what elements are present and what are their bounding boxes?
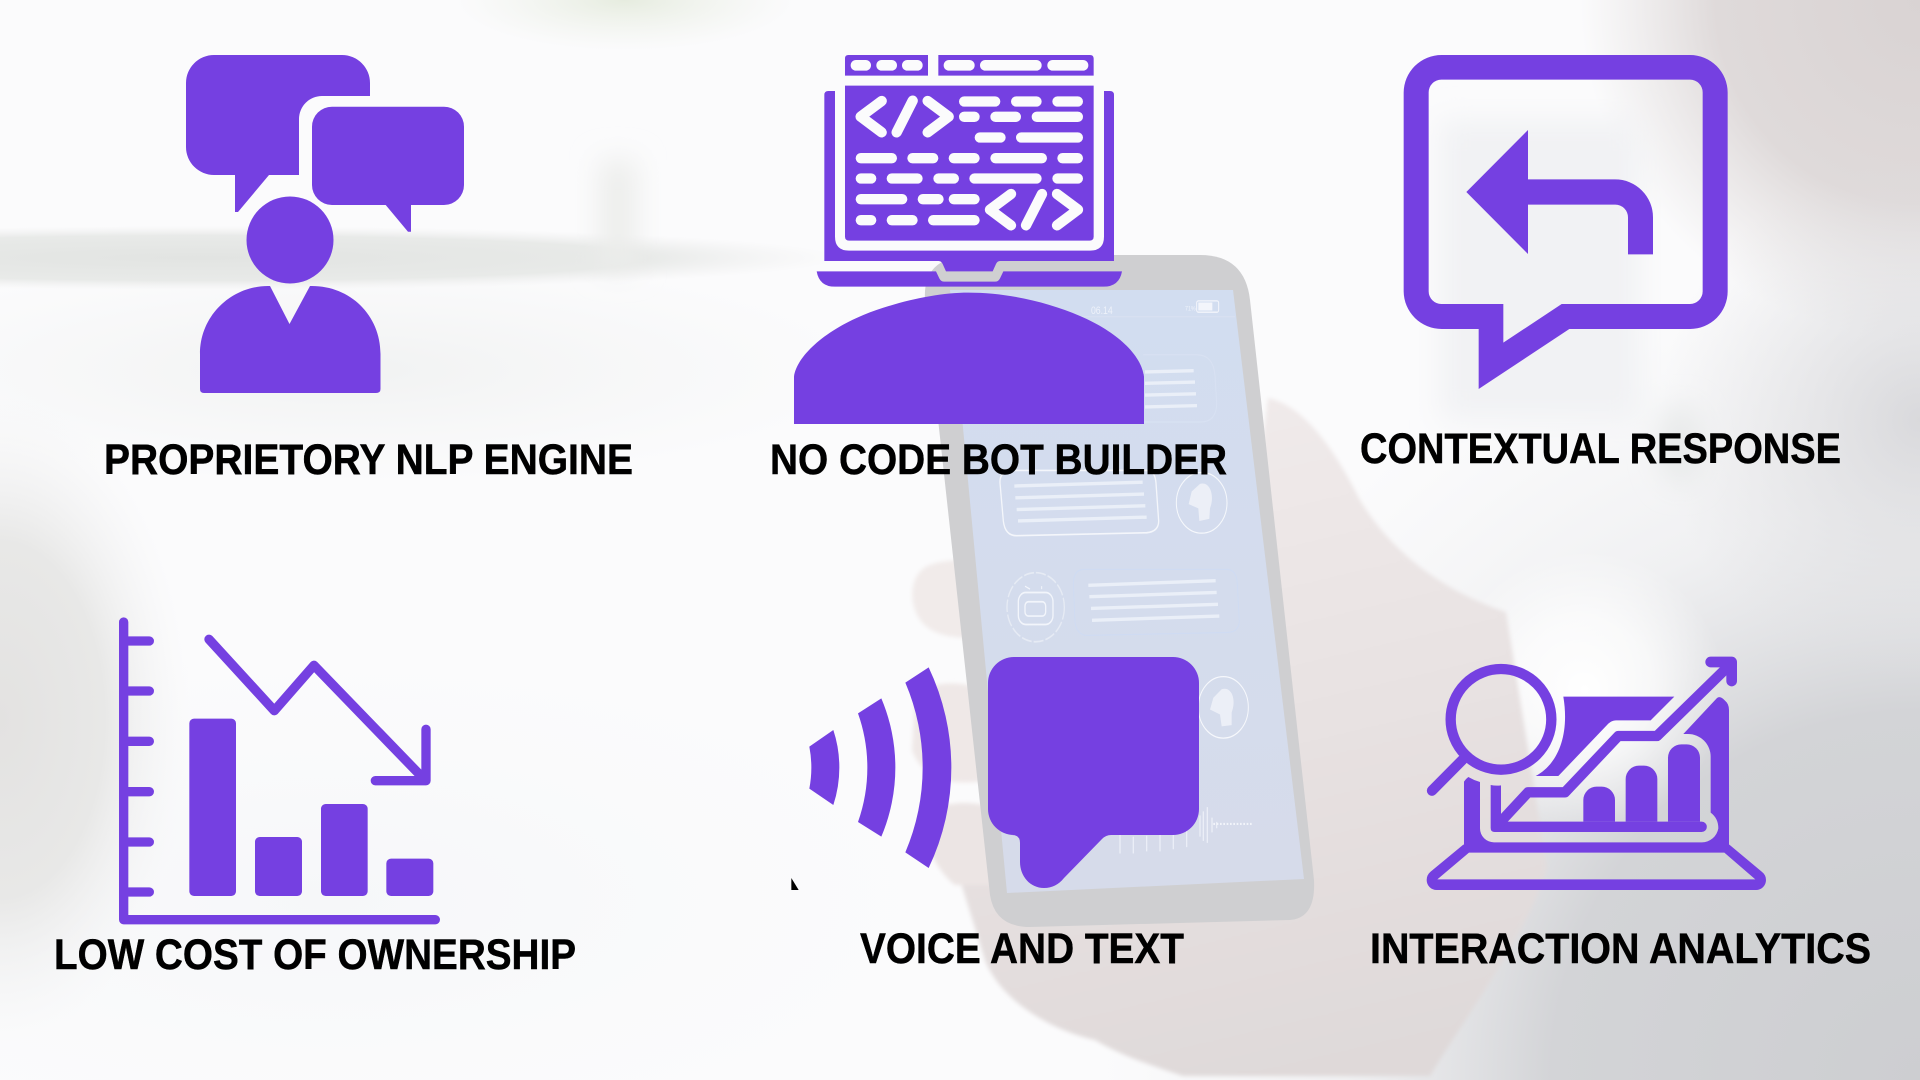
heading: no code bot builder: NO CODE BOT BUILDER bbox=[770, 436, 1227, 484]
bars bbox=[189, 719, 433, 896]
icon: text message bubble bbox=[988, 657, 1199, 888]
trend arrow bbox=[1497, 665, 1729, 825]
hand holding the phone bbox=[912, 398, 1547, 1076]
icon: voice waves bbox=[791, 667, 951, 890]
code window bbox=[845, 55, 1094, 241]
phone: 06.14 bbox=[1091, 305, 1113, 317]
heading: interaction analytics: INTERACTION ANALYTICS bbox=[1370, 925, 1871, 973]
laptop body bbox=[824, 91, 1114, 271]
phone bbox=[925, 255, 1314, 927]
icon: falling cost bar chart bbox=[124, 622, 435, 920]
heading: voice and text: VOICE AND TEXT bbox=[860, 925, 1184, 973]
magnifier bbox=[1432, 669, 1551, 791]
falling arrow bbox=[209, 639, 426, 781]
icon: laptop with code and dome bbox=[794, 55, 1144, 424]
phone: 71% bbox=[1185, 306, 1196, 313]
chart frame and bars bbox=[1491, 744, 1707, 832]
heading: contextual response: CONTEXTUAL RESPONSE bbox=[1360, 425, 1841, 473]
icon: laptop analytics with magnifier bbox=[1427, 662, 1766, 890]
laptop base bbox=[817, 271, 1122, 287]
heading: proprietory nlp engine: PROPRIETORY NLP ENGINE bbox=[104, 436, 633, 484]
dome shape bbox=[794, 293, 1144, 424]
icon: contextual reply bubble bbox=[1404, 55, 1728, 389]
laptop screen bbox=[1427, 697, 1766, 890]
chart axes bbox=[124, 622, 435, 920]
icon: person with speech bubbles bbox=[186, 55, 464, 393]
heading: low cost of ownership: LOW COST OF OWNERSHIP bbox=[54, 931, 576, 979]
